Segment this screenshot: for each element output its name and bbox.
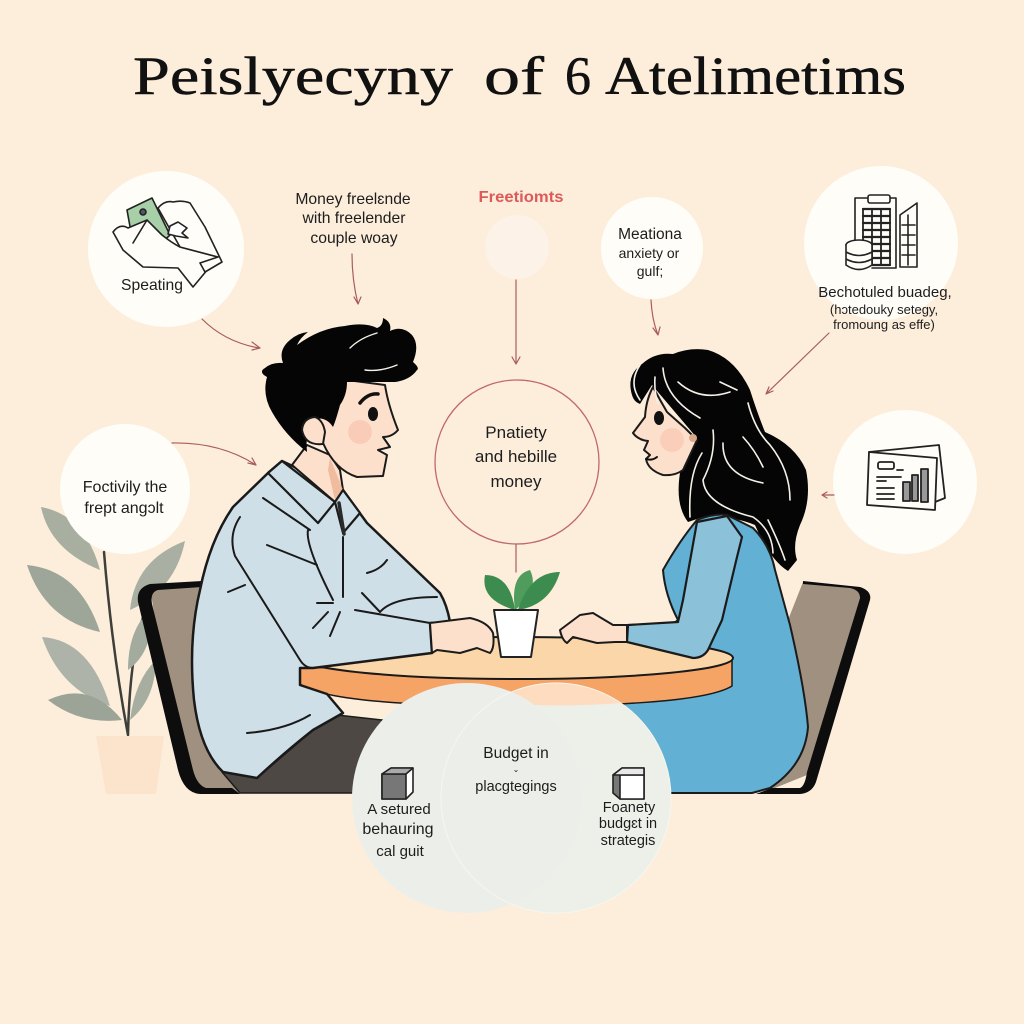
venn center text: ⌄ — [513, 765, 519, 774]
woman face — [633, 387, 697, 475]
circle: central anxiety: and hebille — [475, 447, 557, 466]
venn right text: Foanety — [603, 800, 656, 816]
icon: documents with bar chart — [867, 445, 945, 510]
man neck — [292, 445, 343, 502]
plant: left decoration — [27, 507, 185, 794]
arrow: money text to man — [352, 254, 361, 304]
venn left text: behauring — [362, 821, 434, 838]
venn diagram — [352, 683, 671, 913]
chair: right — [756, 581, 870, 794]
heading: red label: Freetiomts — [478, 189, 564, 206]
title: Atelimetims — [605, 46, 906, 106]
arrow: spending to man — [202, 319, 260, 350]
title: Peislyecyny — [133, 46, 453, 106]
woman sleeve — [627, 516, 742, 658]
text: money freelance: with freelender — [302, 210, 405, 227]
circle: forgiving — [60, 424, 190, 554]
man ear — [302, 417, 325, 444]
circle: small empty — [485, 215, 549, 279]
circle: spending — [88, 171, 244, 327]
venn left cube — [382, 768, 413, 799]
arrows — [172, 254, 834, 572]
circle: anxiety: Meationa — [618, 226, 682, 243]
icon: building and coins — [846, 195, 917, 270]
venn center text: Budget in — [483, 745, 549, 762]
woman hand — [560, 613, 627, 643]
venn center text: placgtegings — [475, 779, 557, 795]
arrow: anxiety to woman — [651, 300, 660, 335]
venn right text: budgɛt in — [599, 816, 657, 832]
circle: building icon — [804, 166, 958, 320]
woman hair — [630, 349, 808, 571]
title: 6 — [565, 46, 591, 106]
chair: left — [138, 581, 250, 794]
circle: anxiety: gulf; — [637, 263, 663, 279]
table — [300, 637, 733, 706]
man collar — [268, 461, 360, 533]
text: scheduled budget: fromoung as effe) — [833, 317, 935, 332]
table plant — [484, 570, 560, 657]
woman dress — [600, 515, 808, 793]
icon: money in hands — [113, 198, 222, 287]
connector: centre to plant — [515, 544, 517, 572]
man hair — [262, 318, 418, 452]
title: of — [484, 46, 544, 106]
man — [192, 318, 494, 793]
circle: central anxiety: money — [490, 472, 542, 491]
arrow: forgiving to man — [172, 443, 256, 465]
text: scheduled budget: Bechotuled buadeg, — [818, 284, 952, 301]
circle: anxiety: anxiety or — [619, 245, 680, 261]
man trousers — [222, 715, 400, 793]
arrow: budget to woman — [766, 333, 829, 394]
venn left text: cal guit — [376, 843, 425, 860]
man face — [312, 380, 398, 477]
circle: forgiving: frept angɔlt — [84, 500, 164, 517]
spending label: Speating — [121, 277, 183, 294]
woman hair highlights — [634, 365, 790, 560]
venn right text: strategis — [601, 833, 655, 849]
circle: central anxiety: Pnatiety — [485, 423, 547, 442]
circle: central anxiety — [435, 380, 599, 544]
arrow: chart to woman — [822, 492, 834, 498]
circle: forgiving: Foctivily the — [83, 479, 167, 496]
title — [133, 46, 906, 106]
text: money freelance: couple woay — [310, 230, 398, 247]
man hand — [430, 618, 494, 653]
circle: chart icon — [833, 410, 977, 554]
arrow: small circle to centre — [512, 280, 520, 364]
text: scheduled budget: (hɔtedouky setegy, — [830, 302, 938, 317]
man shirt — [192, 461, 450, 778]
text: money freelance: Money freelɛnde — [295, 191, 411, 208]
circle: anxiety — [601, 197, 703, 299]
venn right cube — [613, 768, 644, 799]
venn left text: A setured — [367, 801, 431, 818]
